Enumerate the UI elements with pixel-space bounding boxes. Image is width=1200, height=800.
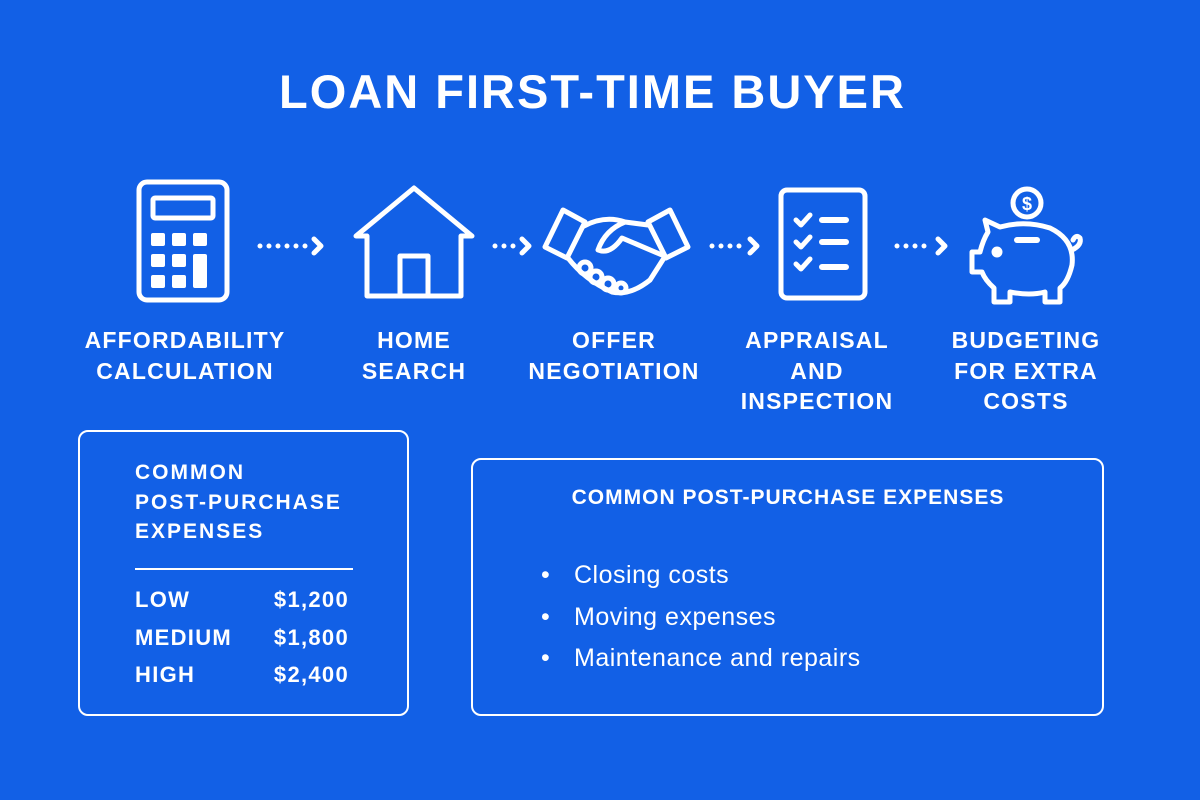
arrow 2 [495,239,529,253]
arrow 1 [260,239,321,253]
arrow 4 [897,239,945,253]
label: budgeting: BUDGETING [952,327,1100,353]
table rows: LOW [135,587,190,612]
icon: house [356,188,472,296]
table heading: EXPENSES [135,520,264,543]
bullet list: • [541,561,550,589]
table heading: COMMON [135,461,245,484]
icon: checklist [781,190,865,298]
bullet list: • [541,644,550,672]
table rows: HIGH [135,662,195,687]
label: home search: HOME [377,327,451,353]
table rows: $1,800 [274,624,349,650]
label: affordability [85,327,285,384]
label: offer negotiation [528,327,700,384]
label: affordability: CALCULATION [96,358,274,384]
arrow 3 [712,239,757,253]
icon: piggy bank: $ [1022,194,1032,214]
table rows: $2,400 [274,662,349,687]
icon: calculator [139,182,227,300]
title: LOAN FIRST-TIME BUYER [279,65,906,118]
label: offer negotiation: OFFER [572,327,656,353]
label: appraisal [741,327,893,414]
list heading: COMMON POST-PURCHASE EXPENSES [572,486,1004,509]
label: budgeting [952,327,1100,414]
label: budgeting: COSTS [983,388,1069,414]
bullet list [541,561,861,672]
table rows [135,587,349,687]
label: appraisal: AND [790,358,844,384]
icon: piggy bank [972,189,1080,302]
icon: handshake [545,210,688,293]
icons row [136,180,1083,304]
label: appraisal: INSPECTION [741,388,893,414]
table heading [135,461,342,543]
label: offer negotiation: NEGOTIATION [528,358,700,384]
table rows: MEDIUM [135,624,232,650]
bullet list: Moving expenses [574,602,776,630]
table rows: $1,200 [274,587,349,612]
bullet list: Maintenance and repairs [574,644,861,672]
bullet list: Closing costs [574,561,729,589]
label: home search: SEARCH [362,358,466,384]
label: appraisal: APPRAISAL [745,327,889,353]
label: home search [362,327,466,384]
bullet list: • [541,602,550,630]
label: affordability: AFFORDABILITY [85,327,285,353]
panel: expense table [78,430,409,716]
table heading: POST-PURCHASE [135,490,342,514]
panel: expense list [471,458,1104,716]
label: budgeting: FOR EXTRA [954,358,1098,384]
